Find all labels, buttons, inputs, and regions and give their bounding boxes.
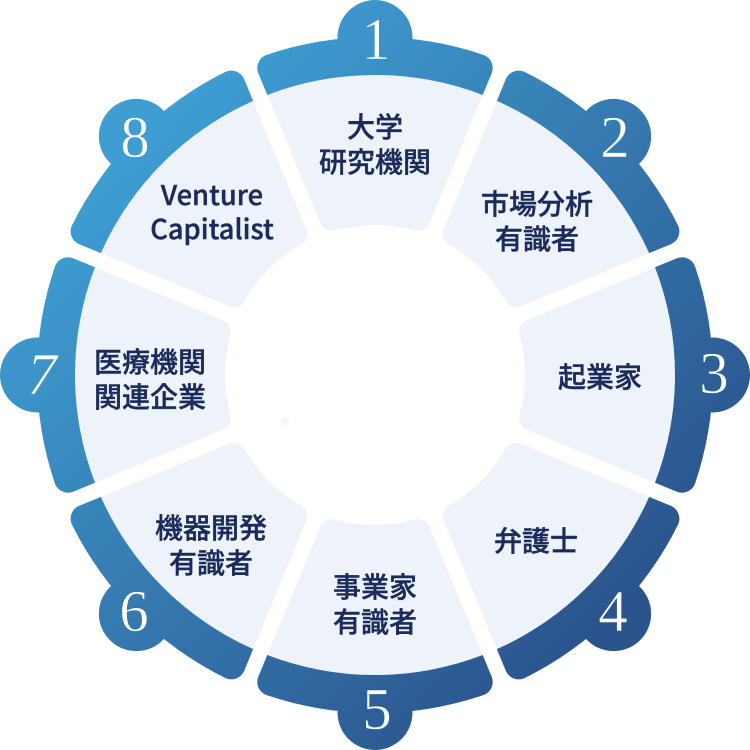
segment 1	[257, 0, 493, 231]
band and badge: 7	[0, 257, 95, 493]
label: 弁護士: 弁護士	[494, 526, 578, 557]
band and badge: 3	[655, 257, 750, 493]
segment 7	[0, 257, 231, 493]
panel: 2	[401, 87, 663, 349]
label: 大学 研究機関: 研究機関	[319, 147, 431, 178]
label: 市場分析 有識者: 市場分析	[481, 189, 593, 220]
segment 4	[401, 401, 723, 723]
label: 市場分析 有識者: 有識者	[495, 224, 579, 255]
label: Venture Capitalist: Venture	[160, 173, 263, 213]
label: 事業家 有識者: 有識者	[333, 607, 417, 638]
number 3: 3	[699, 340, 729, 406]
number 5: 5	[362, 676, 392, 742]
band and badge: 4	[490, 490, 723, 723]
panel: 1	[267, 75, 483, 231]
number 4: 4	[598, 578, 628, 644]
number 2: 2	[600, 104, 630, 170]
label: 機器開発 有識者: 機器開発	[155, 513, 267, 544]
panel: 4	[401, 401, 663, 663]
number 6: 6	[119, 578, 149, 644]
number 1: 1	[361, 6, 391, 72]
segment 8	[27, 27, 349, 349]
band and badge: 1	[257, 0, 493, 95]
segment 3	[519, 257, 750, 493]
label: 医療機関 関連企業: 医療機関	[94, 347, 206, 378]
band and badge: 8	[27, 27, 260, 260]
panel: 7	[75, 267, 231, 483]
panel: 6	[87, 401, 349, 663]
label: Venture Capitalist: Capitalist	[150, 207, 274, 247]
label: 起業家: 起業家	[558, 362, 642, 393]
segment 2	[401, 27, 723, 349]
number 8: 8	[120, 104, 150, 170]
band and badge: 2	[490, 27, 723, 260]
band and badge: 5	[257, 655, 493, 750]
panel: 8	[87, 87, 349, 349]
band and badge: 6	[27, 490, 260, 723]
panel: 3	[519, 267, 675, 483]
segment 5	[257, 519, 493, 750]
label: 事業家 有識者: 事業家	[333, 572, 417, 603]
panel: 5	[267, 519, 483, 675]
number 7: 7	[27, 341, 59, 407]
label: 医療機関 関連企業: 関連企業	[94, 382, 206, 413]
segment 6	[27, 401, 349, 723]
label: 大学 研究機関: 大学	[347, 112, 403, 143]
label: 機器開発 有識者: 有識者	[169, 548, 253, 579]
